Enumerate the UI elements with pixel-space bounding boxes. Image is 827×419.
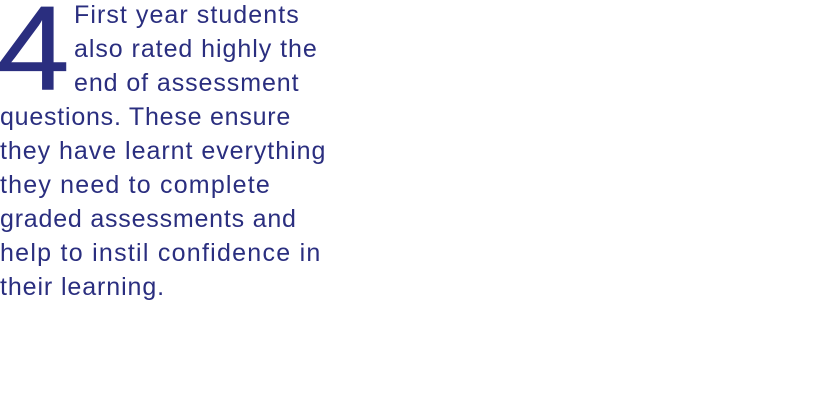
body paragraph [0, 1, 326, 301]
body paragraph: graded assessments and [0, 205, 297, 233]
body paragraph: they have learnt everything [0, 137, 326, 165]
body paragraph: end of assessment [74, 69, 299, 97]
body paragraph: also rated highly the [74, 35, 318, 63]
body paragraph: their learning. [0, 273, 165, 301]
body paragraph: help to instil confidence in [0, 239, 322, 267]
body paragraph: questions. These ensure [0, 103, 291, 131]
body paragraph: First year students [74, 1, 300, 29]
body paragraph: they need to complete [0, 171, 271, 199]
